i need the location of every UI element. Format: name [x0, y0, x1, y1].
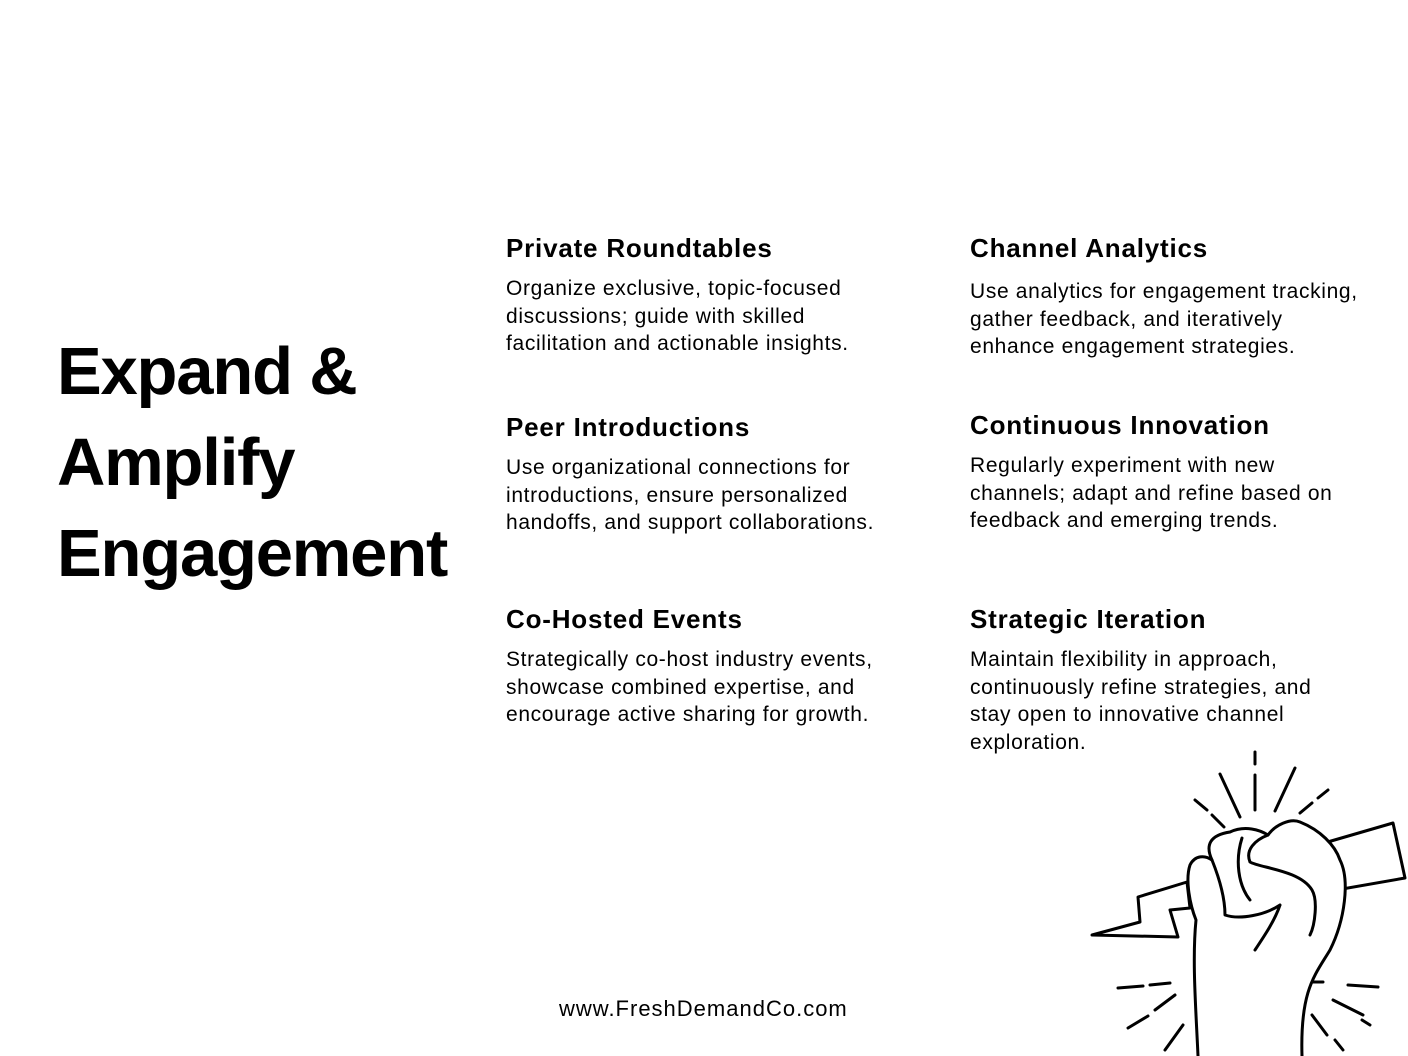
item: strategic iteration: continuously refine strategies, and: [970, 676, 1311, 698]
item: channel analytics: [970, 233, 1358, 358]
item: strategic iteration: Maintain flexibility in approach,: [970, 648, 1277, 671]
item: continuous innovation: Continuous Innovation: [970, 410, 1270, 440]
title: [57, 334, 448, 591]
item: continuous innovation: Regularly experiment with new: [970, 454, 1275, 477]
item: private roundtables: facilitation and actionable insights.: [506, 332, 849, 355]
item: peer introductions: introductions, ensure personalized: [506, 484, 848, 506]
item: strategic iteration: exploration.: [970, 730, 1086, 754]
item: co-hosted events: showcase combined expertise, and: [506, 676, 855, 698]
item: private roundtables: discussions; guide with skilled: [506, 304, 805, 328]
item: channel analytics: Channel Analytics: [970, 233, 1208, 263]
item: strategic iteration: stay open to innovative channel: [970, 703, 1284, 726]
item: channel analytics: enhance engagement strategies.: [970, 335, 1295, 358]
item: strategic iteration: Strategic Iteration: [970, 604, 1206, 634]
item: peer introductions: handoffs, and support collaborations.: [506, 511, 874, 534]
item: private roundtables: Private Roundtables: [506, 233, 773, 263]
item: peer introductions: Peer Introductions: [506, 412, 750, 442]
item: private roundtables: Organize exclusive, topic-focused: [506, 277, 841, 300]
item: channel analytics: Use analytics for engagement tracking,: [970, 280, 1358, 303]
item: co-hosted events: encourage active sharing for growth.: [506, 703, 869, 726]
title: Engagement: [57, 516, 447, 591]
item: continuous innovation: channels; adapt and refine based on: [970, 482, 1333, 504]
item: private roundtables: [506, 233, 849, 355]
item: co-hosted events: Strategically co-host industry events,: [506, 648, 873, 671]
item: peer introductions: Use organizational connections for: [506, 456, 850, 479]
item: channel analytics: gather feedback, and iteratively: [970, 308, 1283, 330]
item: continuous innovation: feedback and emerging trends.: [970, 509, 1278, 532]
item: strategic iteration: [970, 604, 1311, 754]
title: Amplify: [57, 425, 294, 500]
item: continuous innovation: [970, 410, 1333, 532]
footer url: www.FreshDemandCo.com: [559, 996, 848, 1021]
item: co-hosted events: Co-Hosted Events: [506, 604, 743, 634]
title: Expand &: [57, 334, 356, 409]
item: co-hosted events: [506, 604, 873, 726]
item: peer introductions: [506, 412, 874, 534]
